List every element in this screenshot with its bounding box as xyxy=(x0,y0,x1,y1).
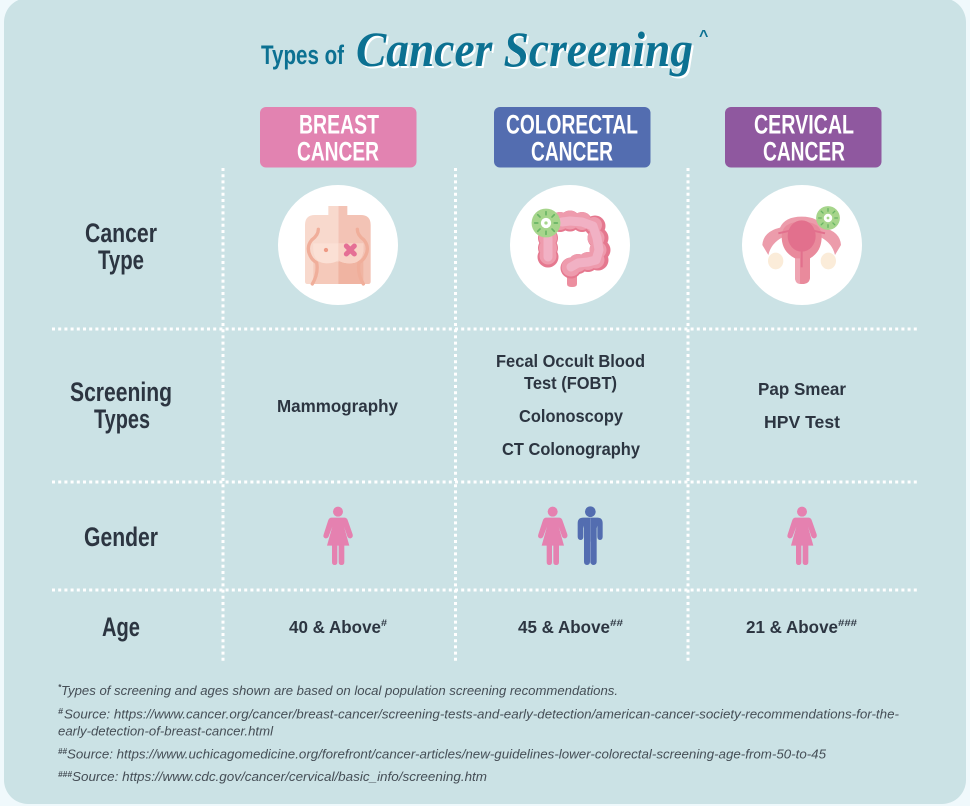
cervical screening types: HPV Test xyxy=(764,412,840,432)
footnotes: early-detection-of-breast-cancer.html xyxy=(58,724,274,738)
footnotes: # xyxy=(58,707,64,716)
colorectal screening types: Test (FOBT) xyxy=(524,373,617,393)
age: breast: # xyxy=(381,618,387,628)
icons: woman and man, colorectal xyxy=(538,506,603,565)
header: breast cancer: CANCER xyxy=(297,136,379,166)
title: Cancer Screening xyxy=(358,23,695,79)
icon: woman, cervical xyxy=(787,507,817,565)
footnotes: ## xyxy=(58,747,68,756)
row label: cancer type xyxy=(85,218,157,275)
header: breast cancer xyxy=(260,107,416,168)
colorectal screening types xyxy=(496,351,645,459)
grid lines xyxy=(52,168,918,662)
colorectal screening types: CT Colonography xyxy=(502,439,640,459)
row label: age: Age xyxy=(102,612,140,642)
breast screening types: Mammography xyxy=(277,396,398,416)
footnotes: Source: https://www.uchicagomedicine.org/forefront/cancer-articles/new-guidelines-lower-colorectal-screening-age-from-50-to-45 xyxy=(67,746,827,762)
row label: screening types xyxy=(70,377,172,434)
age: colorectal: 45 & Above xyxy=(518,617,610,637)
footnotes xyxy=(58,683,900,784)
footnotes: * xyxy=(58,683,62,692)
colorectal screening types: Colonoscopy xyxy=(519,406,623,426)
header: colorectal cancer: COLORECTAL xyxy=(506,110,638,140)
age: colorectal: ## xyxy=(610,618,623,628)
cervical screening types: Pap Smear xyxy=(758,379,846,399)
header: breast cancer: BREAST xyxy=(299,110,379,140)
title: ^ xyxy=(699,28,708,45)
header: cervical cancer: CANCER xyxy=(763,136,845,166)
row label: gender: Gender xyxy=(84,522,158,552)
header: colorectal cancer: CANCER xyxy=(531,136,613,166)
row label: screening types: Screening xyxy=(70,377,172,407)
footnotes: ### xyxy=(58,770,73,779)
row label: screening types: Types xyxy=(94,404,150,434)
age: breast: 40 & Above xyxy=(289,617,381,637)
footnotes: Types of screening and ages shown are based on local population screening recommendations. xyxy=(61,683,618,698)
header: cervical cancer xyxy=(725,107,882,168)
icon: woman, breast xyxy=(323,507,353,565)
row label: cancer type: Cancer xyxy=(85,218,157,248)
cervical screening types xyxy=(758,379,846,432)
icon: breast xyxy=(278,185,398,305)
footnotes: Source: https://www.cancer.org/cancer/breast-cancer/screening-tests-and-early-detection/american-cancer-society-recommendations-for-the- xyxy=(64,706,900,722)
age: cervical: 21 & Above xyxy=(746,617,838,637)
header: cervical cancer: CERVICAL xyxy=(754,110,854,140)
colorectal screening types: Fecal Occult Blood xyxy=(496,351,645,371)
icon: uterus xyxy=(742,185,862,305)
header: colorectal cancer xyxy=(494,107,650,168)
title: Types of xyxy=(261,40,345,70)
row label: cancer type: Type xyxy=(98,245,144,275)
title: Cancer Screening xyxy=(356,21,693,77)
icon: colon xyxy=(510,185,630,305)
footnotes: Source: https://www.cdc.gov/cancer/cervical/basic_info/screening.htm xyxy=(72,769,487,784)
age: cervical: ### xyxy=(838,618,857,628)
